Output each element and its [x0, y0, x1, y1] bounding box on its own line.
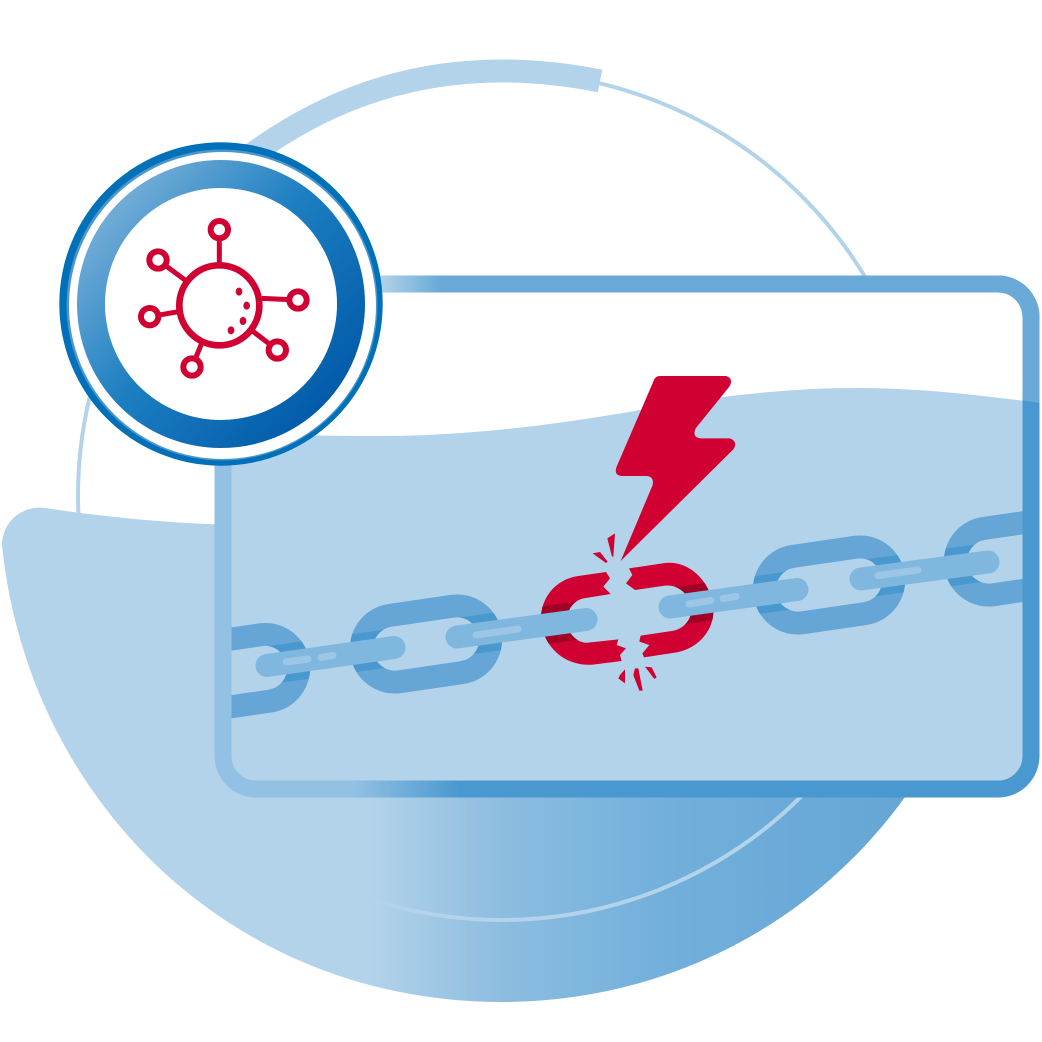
panel wave fill	[215, 388, 1040, 790]
badge ring inner edge	[66, 150, 378, 460]
shards	[593, 533, 657, 691]
virus nodes	[141, 221, 307, 376]
virus dots	[228, 288, 250, 334]
panel interior	[223, 284, 1031, 789]
chain	[165, 514, 1042, 715]
panel frame	[223, 284, 1031, 789]
connector bars	[267, 562, 988, 666]
icon: virus	[141, 221, 307, 376]
badge	[59, 142, 383, 466]
background blob with gradient	[2, 508, 905, 1002]
icon: lightning bolt and shards	[593, 376, 735, 691]
chain links	[165, 514, 1042, 715]
red link shadows	[541, 583, 714, 644]
bar highlights	[286, 570, 918, 662]
badge outer ring	[59, 142, 383, 466]
link shadows	[267, 562, 988, 666]
lightning bolt	[616, 376, 735, 561]
thick ring arc	[225, 71, 600, 175]
virus body	[179, 265, 259, 345]
panel	[165, 284, 1042, 790]
virus spikes	[150, 230, 298, 367]
thin ring	[78, 72, 926, 920]
badge gradient ring	[91, 174, 351, 434]
broken red link	[541, 563, 713, 665]
badge white gap	[69, 152, 376, 459]
panel frame upper part	[380, 276, 1040, 403]
